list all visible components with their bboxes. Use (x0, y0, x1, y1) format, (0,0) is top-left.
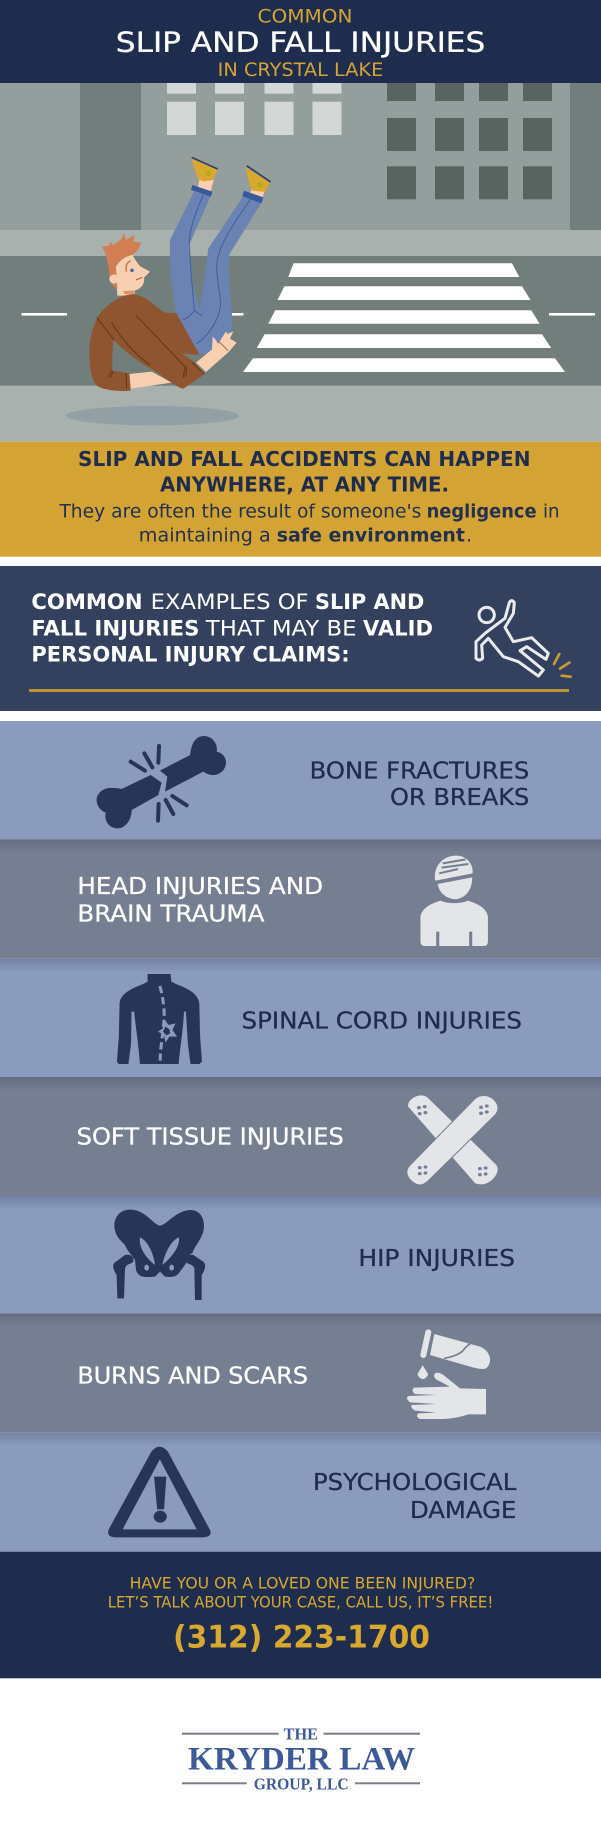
gold divider (29, 689, 569, 692)
header line: location: IN CRYSTAL LAKE (218, 60, 383, 81)
panel heading: VALID (363, 617, 433, 642)
panel: spinal cord (0, 958, 601, 1077)
panel: common examples (0, 566, 601, 711)
icon: broken bone (97, 736, 226, 828)
label: soft tissue: SOFT TISSUE INJURIES (77, 1125, 344, 1151)
panel: bone fractures (0, 721, 601, 839)
label: spinal cord: SPINAL CORD INJURIES (242, 1008, 522, 1034)
icon: falling person (476, 601, 571, 677)
panel: psychological (0, 1432, 601, 1552)
panel: soft tissue (0, 1077, 601, 1196)
label: bone fractures: OR BREAKS (390, 785, 529, 811)
legs and shoes (129, 157, 271, 389)
label: bone fractures: BONE FRACTURES (310, 758, 529, 784)
call to action text: HAVE YOU OR A LOVED ONE BEEN INJURED? (130, 1573, 475, 1592)
intro heading: SLIP AND FALL ACCIDENTS CAN HAPPEN (78, 447, 530, 471)
illustration: falling man (89, 157, 271, 391)
label: head injuries: HEAD INJURIES AND (77, 874, 323, 900)
title: SLIP AND FALL INJURIES (116, 28, 485, 59)
panel heading: EXAMPLES OF (151, 590, 309, 615)
icon: spine (117, 974, 202, 1064)
logo: KRYDER LAW (188, 1741, 415, 1777)
icon: bandaged head (420, 856, 488, 946)
panel: gold intro (0, 442, 601, 557)
panel heading: COMMON (31, 590, 143, 615)
panel heading: PERSONAL INJURY CLAIMS: (31, 643, 350, 668)
icon: pelvis (113, 1210, 205, 1300)
panel heading: THAT MAY BE (205, 617, 356, 642)
logo (182, 1724, 420, 1793)
illustration: street scene (0, 83, 601, 442)
call to action text (108, 1573, 493, 1611)
sweater (89, 294, 205, 391)
icon: chemical on hand (407, 1332, 490, 1419)
header (0, 0, 601, 83)
intro text: negligence (427, 500, 537, 522)
panel: hip (0, 1196, 601, 1313)
intro text: safe environment (277, 525, 465, 547)
label: psychological: DAMAGE (410, 1498, 516, 1524)
intro text (58, 500, 560, 547)
panel: head injuries (0, 839, 601, 958)
logo: THE (284, 1724, 318, 1743)
call to action text: LET’S TALK ABOUT YOUR CASE, CALL US, IT’S FREE! (108, 1592, 493, 1611)
intro heading (78, 447, 530, 497)
label: hip: HIP INJURIES (358, 1246, 515, 1272)
footer: call to action (0, 1552, 601, 1678)
head (102, 233, 150, 296)
label: psychological: PSYCHOLOGICAL (313, 1470, 517, 1496)
panel heading (31, 590, 433, 668)
icon: crossed bandages (407, 1095, 498, 1185)
intro text: . (466, 525, 472, 547)
icon: warning triangle (108, 1447, 211, 1537)
panel heading: SLIP AND (315, 590, 424, 615)
label: psychological (313, 1470, 517, 1524)
label: head injuries (77, 874, 323, 928)
header line: common: COMMON (258, 7, 352, 28)
label: head injuries: BRAIN TRAUMA (77, 902, 265, 928)
label: bone fractures (310, 758, 529, 811)
intro heading: ANYWHERE, AT ANY TIME. (160, 473, 449, 497)
panel heading: FALL INJURIES (31, 617, 199, 642)
intro text: maintaining a (139, 525, 271, 547)
logo: GROUP, LLC (254, 1774, 349, 1793)
phone number: (312) 223-1700 (173, 1619, 430, 1655)
panel: burns (0, 1313, 601, 1432)
intro text: in (543, 500, 560, 522)
label: burns: BURNS AND SCARS (77, 1364, 308, 1390)
intro text: They are often the result of someone's (58, 500, 421, 522)
